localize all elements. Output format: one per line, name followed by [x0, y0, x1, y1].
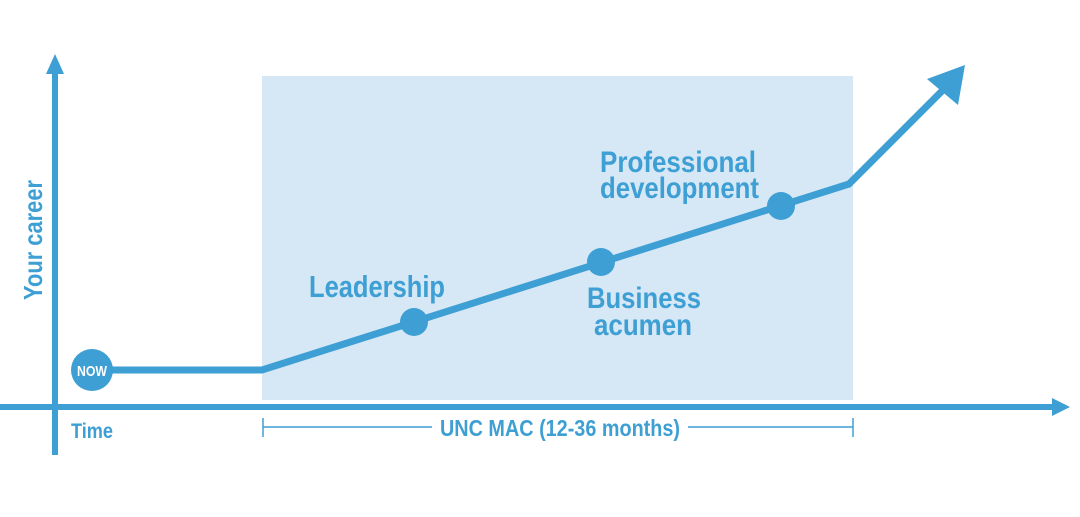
career line arrow — [92, 65, 965, 370]
milestone: Business acumen: acumen — [594, 309, 692, 342]
NOW marker — [71, 349, 113, 391]
axis label: Time: Time — [71, 420, 113, 443]
milestone: Professional development: development — [600, 172, 759, 205]
bracket label: UNC MAC (12-36 months) — [440, 415, 680, 441]
milestone: Leadership: Leadership — [309, 269, 445, 304]
axis label: Your career: Your career — [18, 180, 48, 300]
vertical axis — [46, 54, 64, 455]
milestone: Leadership — [309, 269, 445, 336]
bracket: UNC MAC duration — [263, 418, 853, 437]
milestone: Professional development: Professional — [600, 146, 756, 179]
horizontal axis — [0, 398, 1070, 416]
milestone: Business acumen: Business — [587, 282, 701, 315]
panel: UNC MAC period shaded area — [262, 76, 853, 400]
milestone: Professional development — [600, 146, 795, 220]
milestone: Business acumen — [587, 248, 701, 342]
NOW marker: NOW — [77, 363, 108, 380]
